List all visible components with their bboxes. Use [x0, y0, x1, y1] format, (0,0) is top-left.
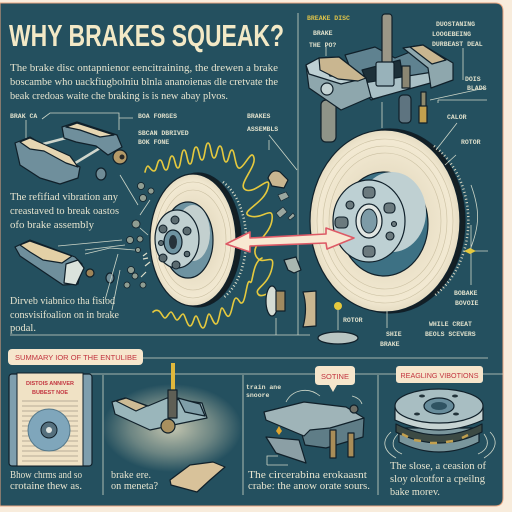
caption two — [111, 470, 158, 492]
upper right labels — [307, 15, 487, 165]
big brake disc — [310, 129, 468, 313]
left text block: pedal: Dirveb viabnico tha fisiod — [10, 296, 116, 307]
upper left callout labels: BRAK CA — [10, 113, 37, 120]
small rotor parts center — [266, 171, 358, 344]
loose pad — [170, 462, 225, 492]
vibration badge: REAGLING VIBOTIONS — [400, 373, 479, 380]
caption four: The slose, a ceasion of — [390, 461, 487, 472]
summary badge — [8, 349, 143, 365]
vibration badge — [396, 366, 483, 383]
upper left callout labels: BOK FONE — [138, 139, 169, 146]
small note label — [246, 384, 362, 404]
upper right labels: BLADS — [467, 85, 487, 92]
lower right disc labels: BOBAKE — [454, 290, 478, 297]
upper right labels: CALOR — [447, 114, 467, 121]
intro text — [10, 63, 278, 102]
caption one — [10, 470, 82, 492]
document panel — [9, 373, 92, 466]
debris and vibration lines — [58, 175, 154, 310]
icon: caliper with dust — [102, 363, 242, 492]
lower right disc labels: SHIE — [386, 331, 402, 338]
icon: large caliper upper right — [306, 14, 453, 142]
lower right disc labels: BEOLS SCEVERS — [425, 331, 476, 338]
document panel: DISTOIS ANNIVER — [26, 381, 74, 387]
intro text: beak credoas waite che braking is is new abay plvos. — [10, 91, 228, 102]
lower right disc labels — [343, 185, 488, 348]
soothing badge — [315, 366, 355, 392]
upper left callout labels: SBCAN DBRIVED — [138, 130, 189, 137]
caption two: brake ere. — [111, 470, 151, 481]
left text block: pedal — [10, 296, 119, 334]
caption four: bake morev. — [390, 487, 440, 498]
upper left callout labels: BOA FORGES — [138, 113, 177, 120]
upper right labels: ROTOR — [461, 139, 481, 146]
intro text: The brake disc ontapnienor eencitraining, the drewen a brake — [10, 63, 278, 74]
upper right labels: THE PO? — [309, 42, 336, 49]
caption two: on meneta? — [111, 481, 158, 492]
upper right labels: LOOGEBEING — [432, 31, 471, 38]
left text block: vibration: ofo brake assembly — [10, 220, 95, 231]
left text block: pedal: consvisifoalion on in brake — [10, 310, 119, 321]
caption four: sloy olcotfor a cpeilng — [390, 474, 486, 485]
caption one: Bhow chrms and so — [10, 470, 82, 481]
left text block: vibration: The refifiad vibration any — [10, 192, 119, 203]
lower right disc labels: BRAKE — [380, 341, 400, 348]
soothing badge: SOTINE — [321, 372, 349, 381]
caption four — [390, 461, 487, 498]
left brake disc — [150, 173, 264, 307]
icon: bearing disc — [385, 389, 495, 458]
upper left callout labels: BRAKES — [247, 113, 271, 120]
caption three: The circerabina erokaasnt — [248, 470, 367, 481]
upper right labels: BRAKE — [313, 30, 333, 37]
lower right disc labels: WHILE CREAT — [429, 321, 472, 328]
upper right labels: DURBEAST DEAL — [432, 41, 483, 48]
left text block: vibration — [10, 192, 119, 231]
left hub bolts — [158, 216, 191, 269]
caption one: crotaine thew as. — [10, 481, 82, 492]
title: WHY BRAKES SQUEAK? — [9, 18, 284, 53]
double arrow — [226, 228, 354, 252]
intro text: boscambe who uackfiugbolniu blnla ananoienas dle cretvate the — [10, 77, 278, 88]
left text block: pedal: podal. — [10, 323, 36, 334]
upper left callout labels — [10, 113, 297, 170]
big hub bolts — [335, 187, 396, 257]
upper right labels: DUOSTANING — [436, 21, 475, 28]
lower right disc labels: ROTOR — [343, 317, 363, 324]
upper left callout labels: ASSEMBLS — [247, 126, 278, 133]
icon: brake pad mid left — [15, 240, 114, 285]
lower right disc labels: BOVOIE — [455, 300, 479, 307]
summary badge: SUMMARY IOR OF THE ENTULIBE — [15, 353, 137, 362]
squiggle waves — [145, 143, 273, 328]
caption three — [248, 470, 370, 492]
left text block: vibration: creastaved to break oastos — [10, 206, 119, 217]
icon: caliper assembly — [264, 402, 364, 465]
small note label: snoore — [246, 392, 270, 399]
small note label: train ane — [246, 384, 281, 391]
upper right labels: DOIS — [465, 76, 481, 83]
upper right labels: BREAKE DISC — [307, 15, 350, 22]
document panel: BUBEST NOE — [32, 390, 68, 396]
caption three: crabe: the anow orate sours. — [248, 481, 370, 492]
icon: small caliper upper left — [15, 122, 127, 184]
